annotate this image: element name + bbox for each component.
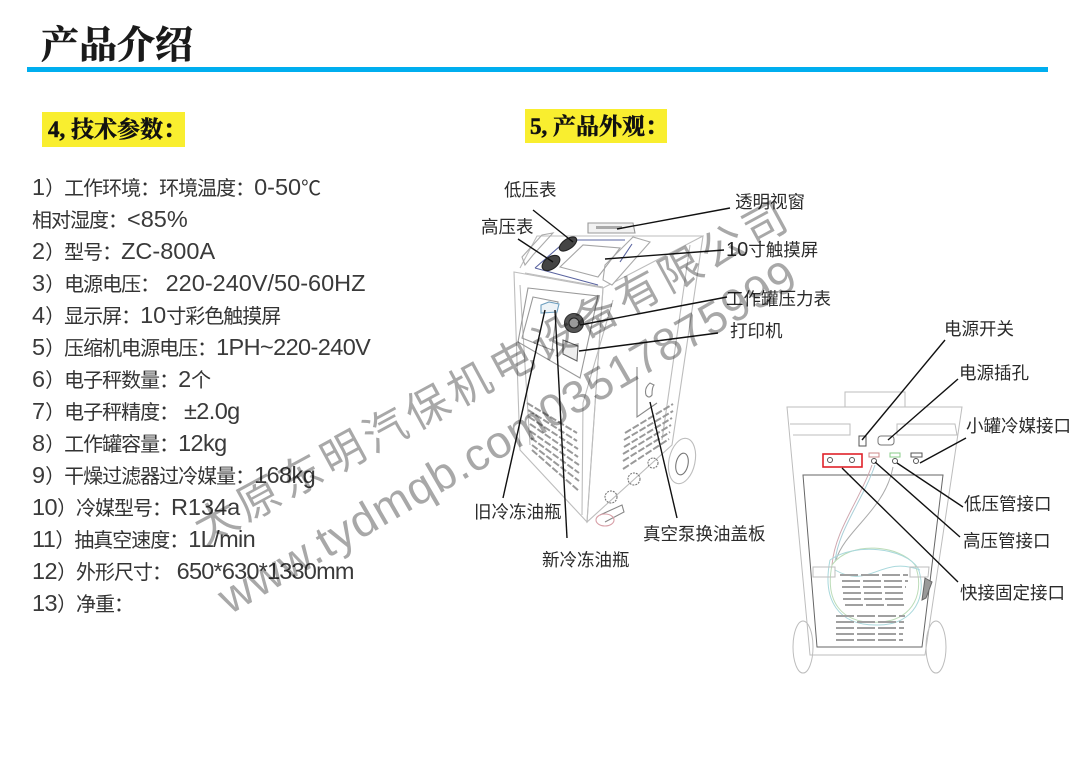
- callout labels: 电源开关: [944, 319, 1014, 339]
- text block: technical specifications: 10）冷媒型号：R134a: [32, 494, 240, 520]
- rear machine illustration: [787, 392, 962, 673]
- heading: product appearance: 5, 产品外观：: [530, 114, 668, 139]
- text block: technical specifications: 5）压缩机电源电压：1PH~220-240V: [32, 334, 370, 360]
- callout labels: 高压管接口: [963, 531, 1050, 551]
- rear vents: [836, 575, 908, 640]
- lid trim: [535, 240, 632, 285]
- strap: [813, 567, 929, 577]
- front machine illustration: [514, 223, 703, 526]
- watermark: website and phone: www.tydmqb.com03517875999: [209, 250, 806, 624]
- text block: technical specifications: 相对湿度：<85%: [32, 206, 188, 232]
- text block: technical specifications: 9）干燥过滤器过冷媒量：168kg: [32, 462, 315, 488]
- front recess: [518, 288, 598, 378]
- text block: technical specifications: 3）电源电压： 220-240V/50-60HZ: [32, 270, 365, 296]
- text block: technical specifications: 12）外形尺寸： 650*630*1330mm: [32, 558, 354, 584]
- top handle: [588, 223, 635, 233]
- title: 产品介绍: [41, 25, 193, 67]
- touch screen: [560, 245, 620, 277]
- title underline bar: [27, 67, 1048, 72]
- text block: technical specifications: 13）净重：: [32, 590, 133, 616]
- hoses: [828, 465, 921, 625]
- callout labels: 旧冷冻油瓶: [474, 502, 562, 522]
- callout labels: 真空泵换油盖板: [643, 524, 766, 544]
- text block: technical specifications: 11）抽真空速度：1L/min: [32, 526, 255, 552]
- side handles: [522, 233, 553, 265]
- wheels: [596, 436, 699, 526]
- callout labels: 低压表: [504, 180, 556, 200]
- text block: technical specifications: 4）显示屏：10寸彩色触摸屏: [32, 302, 280, 328]
- text block: technical specifications: [32, 174, 371, 616]
- text block: technical specifications: 8）工作罐容量：12kg: [32, 430, 227, 456]
- callout labels: 低压管接口: [964, 494, 1052, 514]
- callout labels: 高压表: [481, 217, 534, 237]
- side vents: [527, 403, 673, 491]
- body: [787, 407, 962, 655]
- wheels: [793, 621, 813, 673]
- top handle: [845, 392, 905, 407]
- watermark: company name: 太原东明汽保机电设备有限公司: [187, 191, 800, 554]
- pressure gauges: [539, 234, 579, 274]
- leader lines: [503, 208, 966, 582]
- red highlight box: [823, 454, 862, 467]
- text block: technical specifications: 7）电子秤精度： ±2.0g: [32, 398, 240, 424]
- printer: [563, 340, 578, 361]
- callout labels: 打印机: [730, 321, 782, 341]
- side handles: [790, 424, 957, 435]
- switch and socket: [859, 436, 866, 446]
- callout labels: 工作罐压力表: [726, 289, 831, 309]
- ports: [828, 453, 922, 464]
- text block: technical specifications: 2）型号：ZC-800A: [32, 238, 215, 264]
- text block: technical specifications: 1）工作环境：环境温度：0-50℃: [32, 174, 320, 200]
- callout labels: 快接固定接口: [960, 583, 1065, 603]
- machine body: [514, 236, 703, 522]
- callout labels: 新冷冻油瓶: [542, 550, 630, 570]
- heading: technical parameters: [42, 112, 185, 147]
- rear panel: [803, 475, 943, 647]
- callout labels: 电源插孔: [959, 363, 1029, 383]
- heading: technical parameters: 4, 技术参数：: [48, 117, 186, 142]
- callout labels: 透明视窗: [735, 192, 805, 212]
- callout labels: 10寸触摸屏: [726, 239, 818, 261]
- text block: technical specifications: 6）电子秤数量：2个: [32, 366, 210, 392]
- callout labels: 小罐冷媒接口: [966, 416, 1071, 436]
- fans: [605, 458, 658, 503]
- pump cover: [637, 367, 657, 417]
- work tank pressure gauge: [564, 314, 584, 332]
- quick connectors: [922, 578, 932, 600]
